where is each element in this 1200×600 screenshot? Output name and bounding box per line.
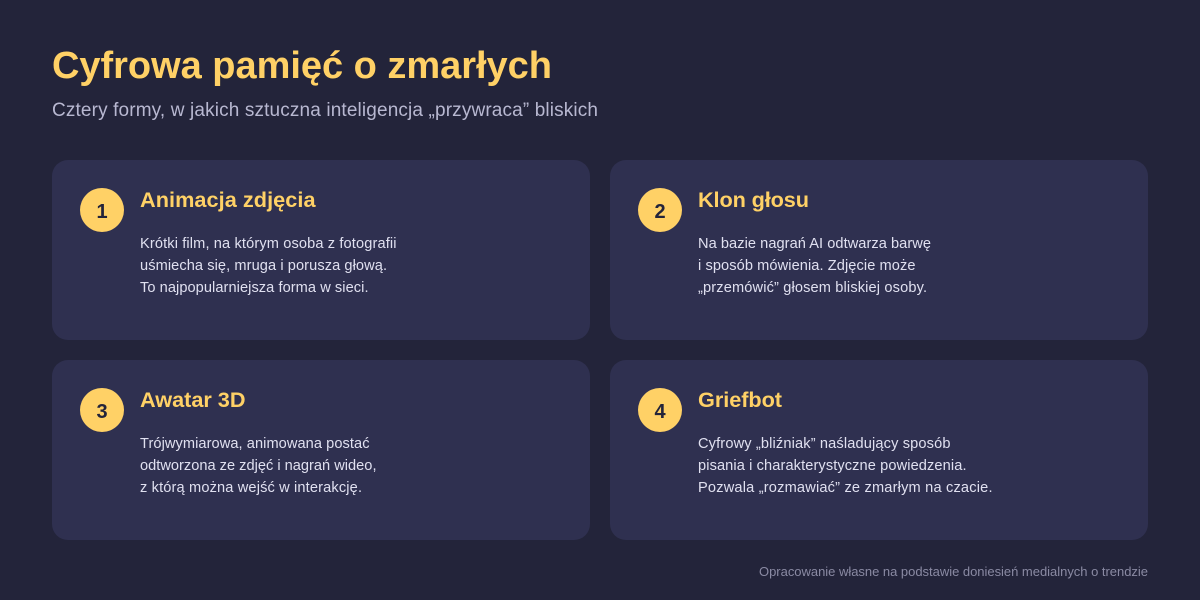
panel: klon głosu <box>610 160 1148 340</box>
icon: number 2: 2 <box>654 201 666 223</box>
text block: animacja zdjęcia: Krótki film, na którym osoba z fotografii <box>140 236 396 252</box>
icon: number 4 <box>638 388 682 432</box>
icon: number 2 <box>638 188 682 232</box>
text block: griefbot: Cyfrowy „bliźniak” naśladujący sposób <box>698 436 950 452</box>
heading: griefbot: Griefbot <box>698 387 782 412</box>
text block: animacja zdjęcia: To najpopularniejsza forma w sieci. <box>140 280 368 296</box>
title: Cyfrowa pamięć o zmarłych <box>52 45 552 87</box>
text block: awatar 3D: odtworzona ze zdjęć i nagrań wideo, <box>140 458 376 474</box>
text block: klon głosu <box>698 236 931 296</box>
text block: klon głosu: Na bazie nagrań AI odtwarza barwę <box>698 236 931 252</box>
text block: awatar 3D: Trójwymiarowa, animowana postać <box>140 436 370 452</box>
text block: klon głosu: „przemówić” głosem bliskiej osoby. <box>698 280 927 296</box>
text block: griefbot: pisania i charakterystyczne powiedzenia. <box>698 458 966 474</box>
text block: klon głosu: i sposób mówienia. Zdjęcie może <box>698 258 916 274</box>
panel: awatar 3D <box>52 360 590 540</box>
panel: griefbot <box>610 360 1148 540</box>
text block: animacja zdjęcia <box>140 236 396 296</box>
text block: griefbot <box>698 436 992 496</box>
icon: number 4: 4 <box>654 401 666 423</box>
icon: number 1: 1 <box>96 201 108 223</box>
heading: animacja zdjęcia: Animacja zdjęcia <box>140 187 316 212</box>
text block: awatar 3D <box>140 436 376 496</box>
text block: awatar 3D: z którą można wejść w interakcję. <box>140 480 362 496</box>
text block: griefbot: Pozwala „rozmawiać” ze zmarłym na czacie. <box>698 480 992 496</box>
icon: number 3: 3 <box>96 401 108 423</box>
icon: number 3 <box>80 388 124 432</box>
icon: number 1 <box>80 188 124 232</box>
subtitle: Cztery formy, w jakich sztuczna inteligencja „przywraca” bliskich <box>52 100 598 121</box>
panel: animacja zdjęcia <box>52 160 590 340</box>
heading: klon głosu: Klon głosu <box>698 187 809 212</box>
heading: awatar 3D: Awatar 3D <box>140 387 246 412</box>
footer source note: Opracowanie własne na podstawie doniesień medialnych o trendzie <box>759 564 1148 579</box>
text block: animacja zdjęcia: uśmiecha się, mruga i porusza głową. <box>140 258 387 274</box>
